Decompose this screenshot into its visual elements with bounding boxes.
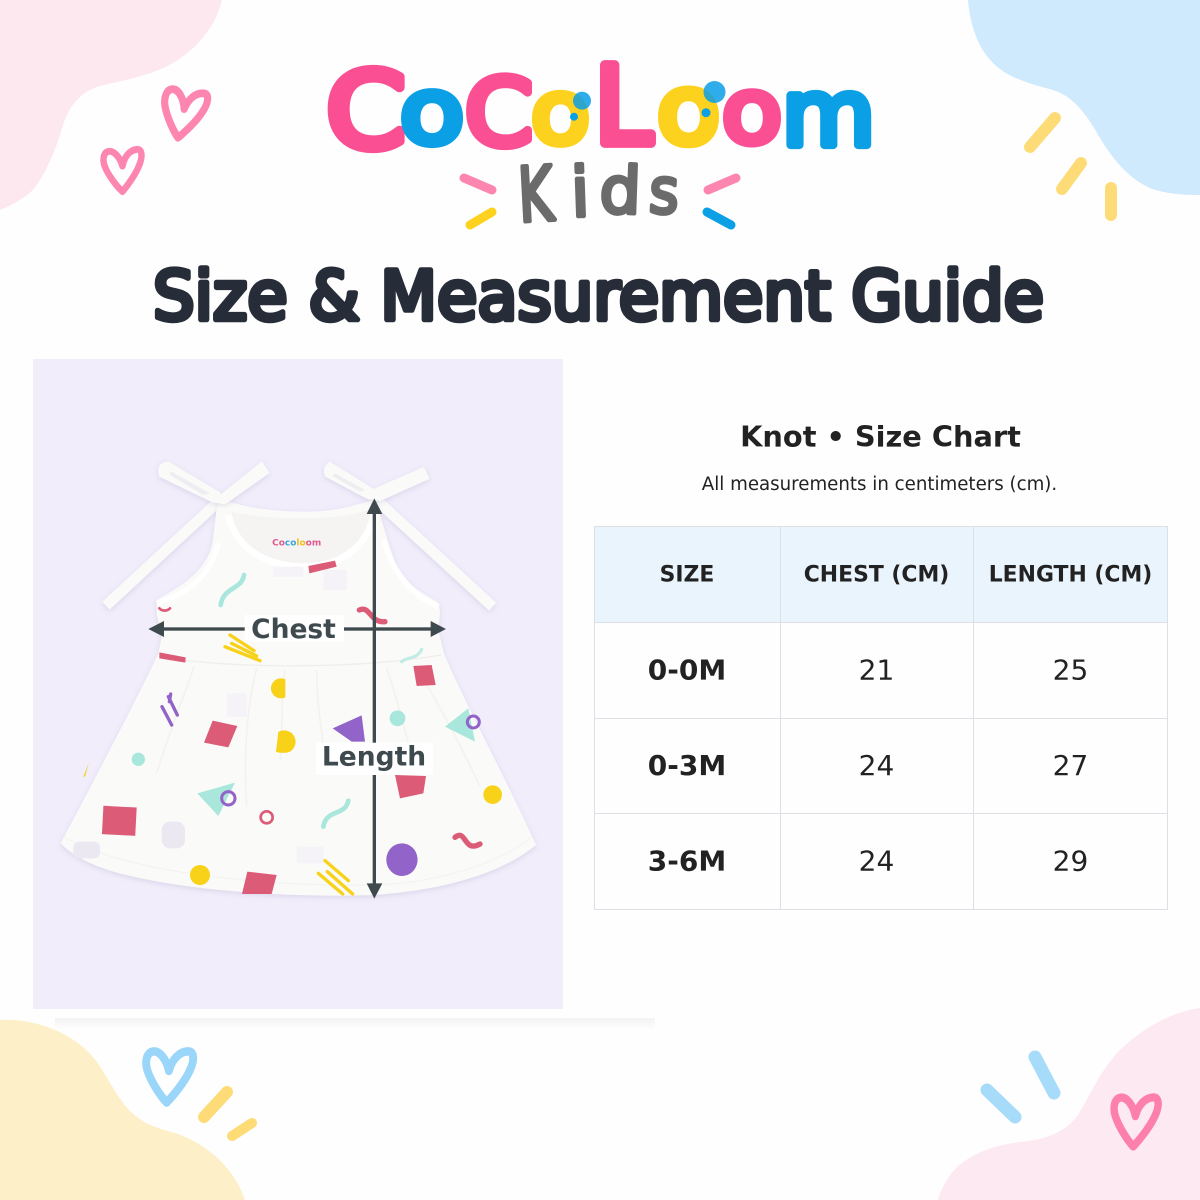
- sparkle: top right yellow dashes: [1030, 118, 1111, 215]
- logo wordmark: o: [657, 55, 720, 165]
- logo wordmark: [326, 43, 875, 172]
- chart subtitle: All measurements in centimeters (cm).: [702, 474, 1057, 495]
- table row 3-6M: 29: [1053, 844, 1088, 878]
- length arrow: [367, 498, 382, 899]
- logo wordmark: C: [326, 51, 406, 172]
- table grid: [594, 526, 1168, 910]
- logo Kids text: [516, 151, 681, 240]
- table row 0-0M: [648, 654, 1088, 686]
- logo Kids text: s: [647, 154, 681, 230]
- dress collar label: Cocoloom: [272, 538, 321, 548]
- table row 3-6M: 3-6M: [648, 844, 726, 878]
- size table: [594, 526, 1168, 910]
- blob: top right blue: [968, 0, 1200, 195]
- dress illustration: [61, 463, 536, 899]
- icon: heart small top left: [104, 149, 141, 192]
- panel shadow: [55, 1018, 655, 1030]
- logo Kids text: d: [598, 153, 642, 230]
- dress body: [61, 500, 536, 896]
- logo dots: [570, 81, 726, 121]
- logo wordmark: C: [465, 60, 533, 167]
- sparkle: bottom right blue dashes: [987, 1057, 1054, 1117]
- logo wordmark: o: [400, 60, 464, 165]
- table row 3-6M: 24: [859, 844, 894, 878]
- table row 0-0M: 0-0M: [648, 654, 726, 686]
- label: Chest: Chest: [251, 614, 336, 645]
- table header labels: CHEST (CM): [804, 562, 949, 588]
- chart title: Knot • Size Chart: [740, 420, 1021, 454]
- dress print shapes: [73, 561, 502, 894]
- panel: dress photo: [33, 359, 563, 1009]
- table row 3-6M: [648, 844, 1088, 878]
- chest arrow: [148, 621, 446, 637]
- logo wordmark: m: [782, 61, 875, 166]
- dress waist seam: [159, 655, 442, 666]
- icon: heart large top left: [157, 86, 209, 142]
- dress ties: [106, 502, 493, 607]
- table header labels: LENGTH (CM): [989, 562, 1152, 588]
- title: Size & Measurement Guide: [153, 258, 1044, 336]
- logo wordmark: L: [595, 43, 652, 169]
- logo wordmark: o: [531, 62, 590, 164]
- label: Length: Length: [322, 742, 426, 772]
- logo wordmark: o: [722, 60, 782, 164]
- table header labels: [660, 562, 1152, 588]
- dress neckline: [232, 508, 373, 568]
- blob: bottom right pink: [938, 1008, 1200, 1200]
- table row 0-3M: 0-3M: [648, 749, 726, 782]
- blob: top left pink: [0, 0, 222, 210]
- logo dashes: [464, 178, 736, 225]
- sparkle: bottom left yellow dashes: [204, 1092, 252, 1136]
- dress ties upper bows: [159, 463, 428, 503]
- logo Kids text: i: [570, 152, 591, 233]
- logo: CocoLoom Kids: [326, 43, 875, 240]
- icon: heart blue bottom left: [143, 1048, 194, 1104]
- table header labels: SIZE: [660, 562, 714, 588]
- table row 0-0M: 21: [859, 654, 894, 686]
- icon: heart pink bottom right: [1111, 1095, 1159, 1148]
- table row 0-3M: [648, 749, 1088, 782]
- table header: [594, 526, 1168, 622]
- table row 0-3M: 27: [1053, 749, 1088, 782]
- dress bow folds: [169, 472, 365, 495]
- logo Kids text: K: [516, 151, 556, 240]
- blob: bottom left yellow: [0, 1020, 245, 1200]
- table row 0-0M: 25: [1053, 654, 1088, 686]
- table row 0-3M: 24: [859, 749, 894, 782]
